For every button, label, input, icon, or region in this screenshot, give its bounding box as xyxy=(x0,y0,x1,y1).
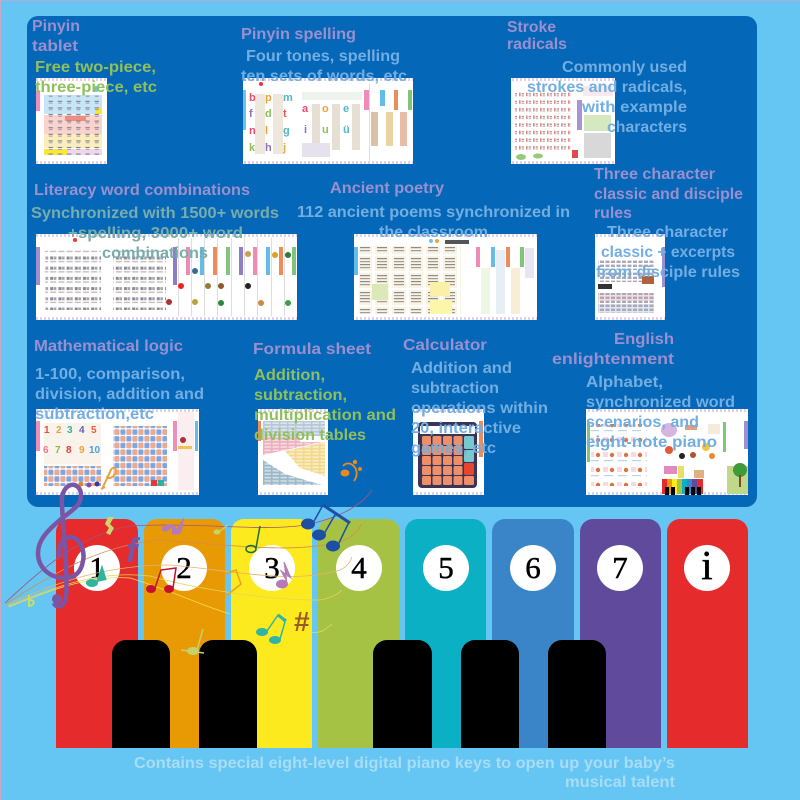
chart thumbnail: mathematical logic: 2 xyxy=(56,425,62,436)
text: three character description: Three character xyxy=(607,224,728,241)
icon: green note on black keys xyxy=(181,629,204,655)
icon: orange note on panel xyxy=(340,460,362,481)
chart thumbnail: stroke radicals xyxy=(511,78,615,164)
chart thumbnail: mathematical logic xyxy=(36,409,199,495)
chart thumbnail: mathematical logic: 4 xyxy=(79,425,85,436)
heading: Ancient poetry: Ancient poetry xyxy=(330,180,444,197)
chart thumbnail: English enlightenment xyxy=(586,409,748,495)
chart thumbnail: pinyin spelling: j xyxy=(282,142,286,154)
text: literacy description xyxy=(31,205,279,262)
key 4 xyxy=(318,519,400,748)
key 1 xyxy=(56,519,138,748)
text: calculator description: Addition and xyxy=(411,360,512,377)
text: mathematical logic description: subtraction,etc xyxy=(35,406,154,423)
text: pinyin tablet description: three-piece, etc xyxy=(35,79,157,96)
icon: orange letter p note xyxy=(101,468,116,489)
text: formula sheet description: Addition, xyxy=(254,367,325,384)
caption xyxy=(134,755,675,791)
key 6: 6 xyxy=(525,550,541,585)
chart thumbnail: mathematical logic: 8 xyxy=(66,445,72,456)
key 7: 7 xyxy=(612,550,628,585)
chart thumbnail: pinyin spelling: p xyxy=(265,92,272,104)
text: stroke radicals description: with example xyxy=(581,99,687,116)
heading: Pinyin tablet xyxy=(32,18,80,55)
musical staff lines xyxy=(5,490,372,633)
text: three character description: classic + excerpts xyxy=(601,244,735,261)
key 7 xyxy=(580,519,661,748)
heading: English enlightenment xyxy=(552,331,675,368)
text: stroke radicals description: characters xyxy=(607,119,687,136)
chart thumbnail: pinyin spelling xyxy=(243,78,413,164)
chart thumbnail: mathematical logic: 3 xyxy=(67,425,73,436)
chart thumbnail: mathematical logic: 9 xyxy=(79,445,85,456)
text: English description xyxy=(586,374,735,451)
key 5 xyxy=(405,519,486,748)
black key 1 xyxy=(112,640,170,748)
icon: red beamed notes xyxy=(146,568,176,592)
text: calculator description: 20, interactive xyxy=(411,420,521,437)
key 8: i xyxy=(701,542,713,588)
key 3 xyxy=(231,519,312,748)
text: pinyin spelling description: Four tones, spelling xyxy=(246,48,400,65)
text: formula sheet description: subtraction, xyxy=(254,387,347,404)
text: pinyin tablet description: Free two-piece, xyxy=(35,59,156,76)
black key 4 xyxy=(461,640,519,748)
chart thumbnail: mathematical logic: 5 xyxy=(91,425,97,436)
chart thumbnail: pinyin spelling: h xyxy=(265,142,272,154)
text: formula sheet description xyxy=(254,367,396,444)
chart thumbnail: pinyin spelling: a xyxy=(302,103,309,115)
heading: Stroke radicals xyxy=(507,19,567,53)
chart thumbnail: calculator xyxy=(413,409,484,495)
heading: Three character classic and disciple rules: rules xyxy=(594,205,632,222)
text: formula sheet description: division tables xyxy=(254,427,366,444)
text: calculator description: operations within xyxy=(411,400,548,417)
chart thumbnail: pinyin spelling: ü xyxy=(343,124,350,136)
icon: small green note xyxy=(214,525,228,534)
text: English description: synchronized word xyxy=(586,394,735,411)
icon: navy beamed notes xyxy=(302,505,350,551)
text: three character description: from disciple rules xyxy=(596,264,740,281)
chart thumbnail: pinyin tablet xyxy=(36,78,107,164)
text: calculator description: games, etc xyxy=(411,440,496,457)
chart thumbnail: pinyin spelling: b xyxy=(249,92,256,104)
text: mathematical logic description xyxy=(35,366,204,423)
chart thumbnail: pinyin spelling: m xyxy=(283,92,293,104)
text: calculator description: subtraction xyxy=(411,380,499,397)
text: literacy description: Synchronized with 1500+ words xyxy=(31,205,279,222)
chart thumbnail: pinyin spelling: t xyxy=(283,108,287,120)
text: ancient poetry description xyxy=(297,204,570,241)
icon: teal beamed notes xyxy=(256,615,286,644)
piano keyboard xyxy=(56,519,748,748)
text: literacy description: +spelling, 3000+ word xyxy=(68,225,243,242)
heading: English enlightenment: enlightenment xyxy=(552,351,675,368)
icon: dark green note xyxy=(246,526,260,552)
caption: Contains special eight-level digital piano keys to open up your baby’s xyxy=(134,755,675,772)
chart thumbnail: pinyin spelling: l xyxy=(265,125,268,137)
heading: Mathematical logic: Mathematical logic xyxy=(34,338,183,355)
icon: teal note on key 1 xyxy=(86,567,106,587)
key 3: 3 xyxy=(264,550,280,585)
chart thumbnail: mathematical logic: 10 xyxy=(89,445,101,456)
text: mathematical logic description: division, addition and xyxy=(35,386,204,403)
chart thumbnail: literacy word combinations xyxy=(36,234,297,320)
icon: sharp sign: # xyxy=(294,606,310,637)
heading: Literacy word combinations: Literacy word combinations xyxy=(34,182,250,199)
icon: purple note xyxy=(162,517,184,535)
key 8 xyxy=(667,519,748,748)
text: stroke radicals description: Commonly used xyxy=(562,59,687,76)
text: stroke radicals description xyxy=(527,59,687,136)
panel: learning modules xyxy=(27,16,757,507)
icon: forte symbol: f xyxy=(126,532,141,570)
heading: English enlightenment: English xyxy=(614,331,674,348)
chart thumbnail: pinyin spelling: e xyxy=(343,103,349,115)
chart thumbnail: pinyin spelling: d xyxy=(265,108,272,120)
key 2 xyxy=(144,519,225,748)
caption: musical talent xyxy=(565,774,675,791)
chart thumbnail: mathematical logic: 7 xyxy=(55,445,61,456)
text: pinyin spelling description: ten sets of words, etc xyxy=(241,68,407,85)
text: mathematical logic description: 1-100, comparison, xyxy=(35,366,185,383)
chart thumbnail: mathematical logic: 6 xyxy=(43,445,49,456)
chart thumbnail: three character classic xyxy=(595,234,665,320)
key 6 xyxy=(492,519,574,748)
heading: Stroke radicals: Stroke xyxy=(507,19,556,36)
text: literacy description: combinations xyxy=(102,245,208,262)
text: English description: scenarios, and xyxy=(586,414,699,431)
black key 5 xyxy=(548,640,606,748)
icon: flat sign xyxy=(29,595,34,606)
text: three character description xyxy=(596,224,740,281)
text: ancient poetry description: 112 ancient poems synchronized in xyxy=(297,204,570,221)
heading: Pinyin spelling: Pinyin spelling xyxy=(241,26,356,43)
icon: treble clef xyxy=(38,485,84,606)
heading: Pinyin tablet: tablet xyxy=(32,38,79,55)
key 4: 4 xyxy=(351,550,367,585)
chart thumbnail: pinyin spelling: o xyxy=(322,103,329,115)
heading: Pinyin tablet: Pinyin xyxy=(32,18,80,35)
heading: Three character classic and disciple rules xyxy=(594,166,743,222)
heading: Calculator: Calculator xyxy=(403,337,487,354)
text: English description: eight-note piano xyxy=(586,434,717,451)
black key 3 xyxy=(373,640,432,748)
chart thumbnail: mathematical logic: 1 xyxy=(44,425,50,436)
text: ancient poetry description: the classroom xyxy=(379,224,488,241)
chart thumbnail: pinyin spelling: i xyxy=(304,124,307,136)
text: stroke radicals description: strokes and radicals, xyxy=(527,79,687,96)
chart thumbnail: pinyin spelling: k xyxy=(249,142,256,154)
heading: Three character classic and disciple rules: classic and disciple xyxy=(594,186,743,203)
heading: Stroke radicals: radicals xyxy=(507,36,567,53)
key 2: 2 xyxy=(176,550,192,585)
chart thumbnail: pinyin spelling: u xyxy=(322,124,329,136)
black key 2 xyxy=(199,640,257,748)
heading: Three character classic and disciple rules: Three character xyxy=(594,166,715,183)
key 5: 5 xyxy=(438,550,454,585)
chart thumbnail: ancient poetry xyxy=(354,234,537,320)
chart thumbnail: pinyin spelling: g xyxy=(283,125,290,137)
icon: purple note on key 3 xyxy=(276,562,291,588)
chart thumbnail: pinyin spelling: f xyxy=(249,108,253,120)
key 1: 1 xyxy=(89,550,105,585)
text: pinyin tablet description xyxy=(35,59,157,96)
text: formula sheet description: multiplication and xyxy=(254,407,396,424)
chart thumbnail: pinyin spelling: n xyxy=(249,125,256,137)
icon: sixteenth note yellow xyxy=(105,517,114,535)
heading: Formula sheet: Formula sheet xyxy=(253,341,372,358)
text: calculator description xyxy=(411,360,548,457)
chart thumbnail: formula sheet xyxy=(258,409,328,495)
icon: orange note outline xyxy=(225,570,241,596)
text: English description: Alphabet, xyxy=(586,374,663,391)
text: pinyin spelling description xyxy=(241,48,407,85)
